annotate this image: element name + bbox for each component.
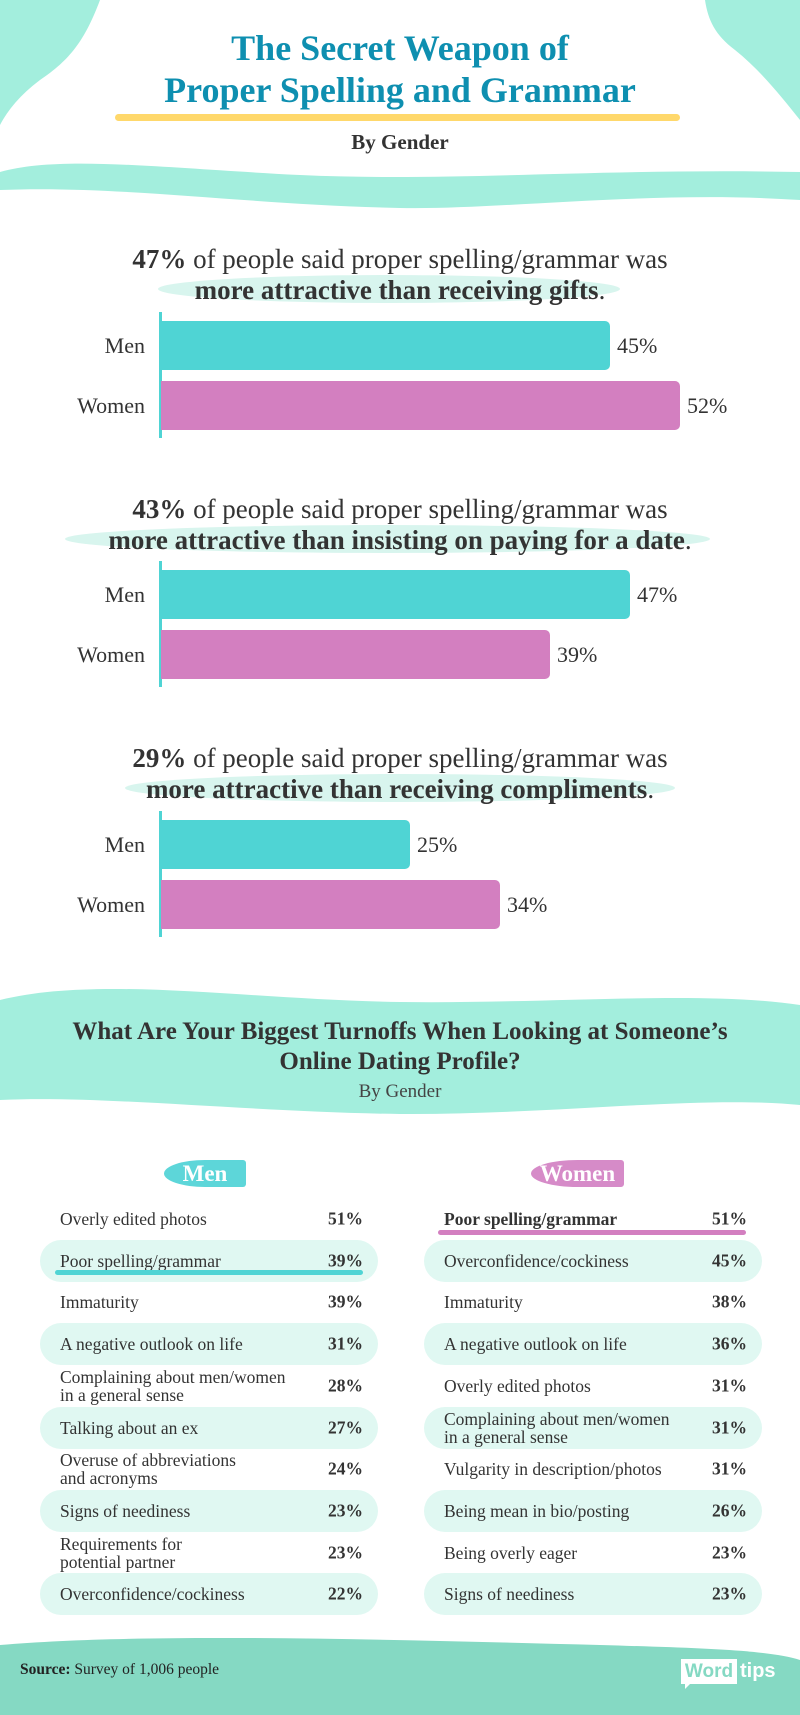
men list: 27% [328, 1417, 363, 1437]
chart 2 [65, 494, 710, 687]
women list: 31% [712, 1375, 747, 1395]
women list: A negative outlook on life [444, 1334, 627, 1354]
section 2 heading: What Are Your Biggest Turnoffs When Looking at Someone’s [72, 1018, 728, 1045]
chart 1: Men [105, 333, 145, 358]
men list: and acronyms [60, 1468, 158, 1488]
logo: tips [740, 1660, 776, 1682]
women list: 26% [712, 1500, 747, 1520]
men list: Requirements for [60, 1534, 182, 1554]
women list: Being overly eager [444, 1543, 577, 1563]
bar women [161, 880, 500, 929]
men list [40, 1208, 378, 1615]
women list: Immaturity [444, 1292, 523, 1312]
chart 2: 39% [557, 642, 597, 667]
chart 1: more attractive than receiving gifts. [195, 275, 605, 305]
yellow underline [115, 114, 680, 121]
section 2 heading: Online Dating Profile? [279, 1048, 521, 1075]
women label: Women [540, 1161, 615, 1186]
men list: 23% [328, 1500, 363, 1520]
chart 2: 47% [637, 582, 677, 607]
men list: 22% [328, 1584, 363, 1604]
men list: 24% [328, 1459, 363, 1479]
chart 3: Women [77, 892, 145, 917]
chart 1: 52% [687, 393, 727, 418]
section 2 heading [72, 1018, 728, 1075]
chart 2: Women [77, 642, 145, 667]
bar men [161, 570, 630, 619]
women list: 51% [712, 1208, 747, 1228]
men list: Signs of neediness [60, 1501, 190, 1521]
chart 3: Men [105, 832, 145, 857]
chart 3: 34% [507, 892, 547, 917]
title [164, 28, 636, 110]
men list: 51% [328, 1208, 363, 1228]
section 2 subtitle: By Gender [359, 1081, 441, 1102]
women list: 31% [712, 1417, 747, 1437]
men list: Talking about an ex [60, 1418, 198, 1438]
chart 2: 43% of people said proper spelling/grammar was [132, 494, 668, 524]
logo [681, 1659, 776, 1689]
chart 3: more attractive than receiving compliments. [146, 774, 654, 804]
chart 3: 25% [417, 832, 457, 857]
title: Proper Spelling and Grammar [164, 70, 636, 110]
highlight [65, 525, 710, 553]
chart 1: 45% [617, 333, 657, 358]
women list: Signs of neediness [444, 1584, 574, 1604]
chart 2: Men [105, 582, 145, 607]
women list: 38% [712, 1292, 747, 1312]
subtitle: By Gender [351, 130, 449, 154]
men list: Overconfidence/cockiness [60, 1584, 245, 1604]
men list: 31% [328, 1334, 363, 1354]
bar women [161, 381, 680, 430]
women list: Complaining about men/women [444, 1408, 670, 1428]
women list: Vulgarity in description/photos [444, 1459, 662, 1479]
chart 1 [77, 244, 727, 438]
chart 3 [77, 743, 675, 937]
men list: potential partner [60, 1552, 175, 1572]
highlight [158, 275, 620, 303]
women list: 36% [712, 1334, 747, 1354]
men list: 23% [328, 1542, 363, 1562]
women list [424, 1208, 762, 1615]
logo: Word [685, 1661, 733, 1682]
men list: 39% [328, 1250, 363, 1270]
chart 2: more attractive than insisting on paying for a date. [108, 525, 692, 555]
men list: in a general sense [60, 1385, 184, 1405]
source: Source: Survey of 1,006 people [20, 1661, 219, 1678]
bar men [161, 321, 610, 370]
men list: Overuse of abbreviations [60, 1450, 236, 1470]
bar men [161, 820, 410, 869]
men label: Men [183, 1161, 227, 1186]
men list: 39% [328, 1292, 363, 1312]
women list: Overconfidence/cockiness [444, 1251, 629, 1271]
men list: 28% [328, 1375, 363, 1395]
men list: Poor spelling/grammar [60, 1251, 221, 1271]
women list: 31% [712, 1459, 747, 1479]
men list: A negative outlook on life [60, 1334, 243, 1354]
women list: 23% [712, 1542, 747, 1562]
title: The Secret Weapon of [231, 28, 569, 68]
women list: 45% [712, 1250, 747, 1270]
chart 1: Women [77, 393, 145, 418]
women list: Overly edited photos [444, 1376, 591, 1396]
women list: 23% [712, 1584, 747, 1604]
chart 1: 47% of people said proper spelling/grammar was [132, 244, 668, 274]
men list: Overly edited photos [60, 1209, 207, 1229]
women list: Being mean in bio/posting [444, 1501, 629, 1521]
men label [164, 1160, 246, 1187]
highlight [125, 774, 675, 802]
women list: in a general sense [444, 1426, 568, 1446]
chart 3: 29% of people said proper spelling/grammar was [132, 743, 668, 773]
women list: Poor spelling/grammar [444, 1209, 617, 1229]
bar women [161, 630, 550, 679]
men list: Immaturity [60, 1292, 139, 1312]
men list: Complaining about men/women [60, 1367, 286, 1387]
